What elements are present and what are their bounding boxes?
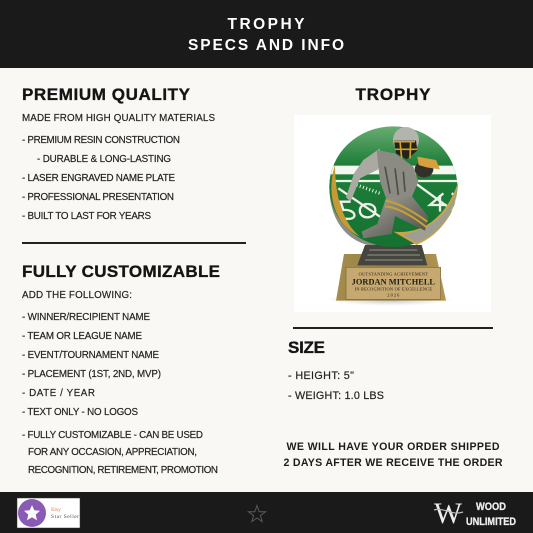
name plate: IN RECOGNITION OF EXCELLENCE bbox=[355, 287, 432, 292]
heading: premium quality: PREMIUM QUALITY bbox=[22, 85, 191, 104]
badge: etsy star seller bbox=[17, 498, 80, 528]
list: customization options bbox=[22, 312, 161, 418]
logo: wood unlimited: W bbox=[434, 497, 463, 530]
torso bbox=[377, 150, 418, 200]
text: customization note: RECOGNITION, RETIREMENT, PROMOTION bbox=[28, 465, 218, 476]
badge: etsy star seller: Etsy bbox=[51, 507, 61, 513]
player bbox=[346, 127, 440, 238]
heading: fully customizable: FULLY CUSTOMIZABLE bbox=[22, 262, 220, 281]
text: add the following: ADD THE FOLLOWING: bbox=[22, 290, 132, 301]
title: TROPHY bbox=[228, 16, 305, 33]
list: customization options: - TEAM OR LEAGUE NAME bbox=[22, 331, 142, 342]
list: customization options: - TEXT ONLY - NO LOGOS bbox=[22, 407, 138, 418]
football and hand bbox=[415, 161, 433, 177]
list: customization options: - DATE / YEAR bbox=[22, 388, 95, 399]
list: customization options: - WINNER/RECIPIENT NAME bbox=[22, 312, 150, 323]
list: quality features: - DURABLE & LONG-LASTING bbox=[37, 154, 171, 165]
text: materials line: MADE FROM HIGH QUALITY MATERIALS bbox=[22, 113, 215, 124]
name plate bbox=[346, 267, 441, 299]
list: quality features: - BUILT TO LAST FOR YEARS bbox=[22, 211, 151, 222]
text: customization note bbox=[22, 430, 218, 476]
name plate: 2026 bbox=[387, 293, 400, 298]
panel: fully customizable bbox=[22, 262, 220, 476]
list: customization options: - PLACEMENT (1ST, 2ND, MVP) bbox=[22, 369, 161, 380]
panel: size bbox=[288, 338, 384, 402]
trophy photo bbox=[294, 115, 491, 312]
logo: wood unlimited bbox=[434, 497, 516, 530]
heading: size: SIZE bbox=[288, 338, 325, 357]
logo: wood unlimited: UNLIMITED bbox=[466, 516, 516, 528]
list: quality features: - PROFESSIONAL PRESENTATION bbox=[22, 192, 174, 203]
list: quality features: - PREMIUM RESIN CONSTRUCTION bbox=[22, 135, 180, 146]
text: customization note: - FULLY CUSTOMIZABLE - CAN BE USED bbox=[22, 430, 203, 441]
gold swoosh bbox=[331, 165, 360, 237]
stand bbox=[357, 245, 427, 265]
shipping note: 2 DAYS AFTER WE RECEIVE THE ORDER bbox=[284, 457, 503, 469]
name plate: OUTSTANDING ACHIEVEMENT bbox=[359, 271, 428, 276]
list: size specs: - WEIGHT: 1.0 LBS bbox=[288, 390, 384, 402]
arm bbox=[346, 148, 380, 202]
header band bbox=[0, 0, 533, 68]
panel: premium quality bbox=[22, 85, 215, 222]
text: customization note: FOR ANY OCCASION, APPRECIATION, bbox=[28, 447, 197, 458]
list: size specs bbox=[288, 370, 384, 402]
helmet bbox=[393, 127, 419, 153]
disc bbox=[329, 167, 390, 245]
badge: etsy star seller: Star Seller bbox=[51, 514, 79, 520]
list: customization options: - EVENT/TOURNAMENT NAME bbox=[22, 350, 159, 361]
logo: wood unlimited: WOOD bbox=[476, 501, 506, 513]
base bbox=[336, 254, 446, 301]
list: quality features bbox=[22, 135, 180, 222]
legs bbox=[362, 196, 428, 238]
shipping note: WE WILL HAVE YOUR ORDER SHIPPED bbox=[286, 441, 500, 453]
footer band bbox=[0, 492, 533, 533]
list: quality features: - LASER ENGRAVED NAME PLATE bbox=[22, 173, 175, 184]
shipping note bbox=[284, 441, 503, 469]
list: size specs: - HEIGHT: 5" bbox=[288, 370, 354, 382]
name plate: JORDAN MITCHELL bbox=[352, 277, 435, 286]
icon: star bbox=[248, 506, 266, 522]
title: SPECS AND INFO bbox=[188, 37, 344, 54]
heading: trophy: TROPHY bbox=[356, 85, 431, 104]
title bbox=[188, 16, 344, 54]
